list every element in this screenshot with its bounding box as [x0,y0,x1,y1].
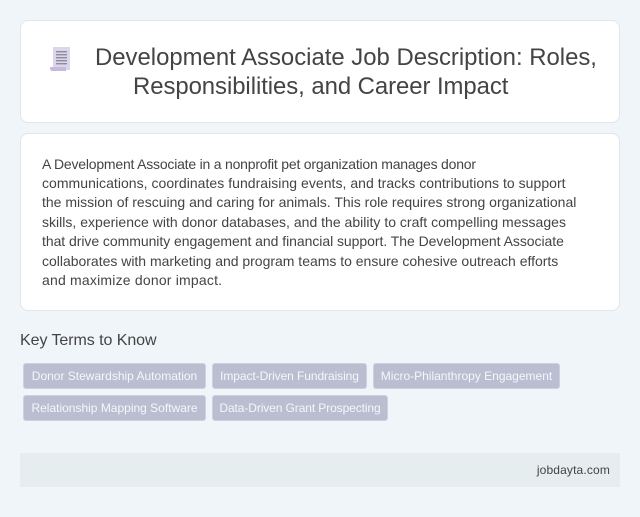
footer source: jobdayta.com [537,463,610,477]
description text: the mission of rescuing and caring for animals. This role requires strong organizational [42,194,576,210]
title: Development Associate Job Description: Roles, [95,44,597,71]
description text: A Development Associate in a nonprofit pet organization manages donor [42,156,476,172]
icon: document scroll [50,47,70,71]
tag: Relationship Mapping Software [31,401,198,415]
tag [23,363,206,389]
tag [373,363,560,389]
title: Responsibilities, and Career Impact [133,73,508,100]
description text: skills, experience with donor databases, and the ability to craft compelling messages [42,214,566,230]
tag: Donor Stewardship Automation [32,369,197,383]
tag: Impact-Driven Fundraising [220,369,359,383]
footer bar [20,453,620,487]
tag [212,363,367,389]
description text: collaborates with marketing and program teams to ensure cohesive outreach efforts [42,253,558,269]
description text: and maximize donor impact. [42,272,222,288]
panel: title card [20,20,620,123]
tag [212,395,388,421]
description text: that drive community engagement and financial support. The Development Associate [42,233,564,249]
tag: Micro-Philanthropy Engagement [381,369,552,383]
panel: description [20,133,620,311]
tag: Data-Driven Grant Prospecting [219,401,381,415]
description text [42,156,576,288]
description text: communications, coordinates fundraising events, and tracks contributions to support [42,175,566,191]
tag list [23,363,560,421]
title [95,44,597,100]
heading: key terms: Key Terms to Know [20,332,157,349]
tag [23,395,206,421]
